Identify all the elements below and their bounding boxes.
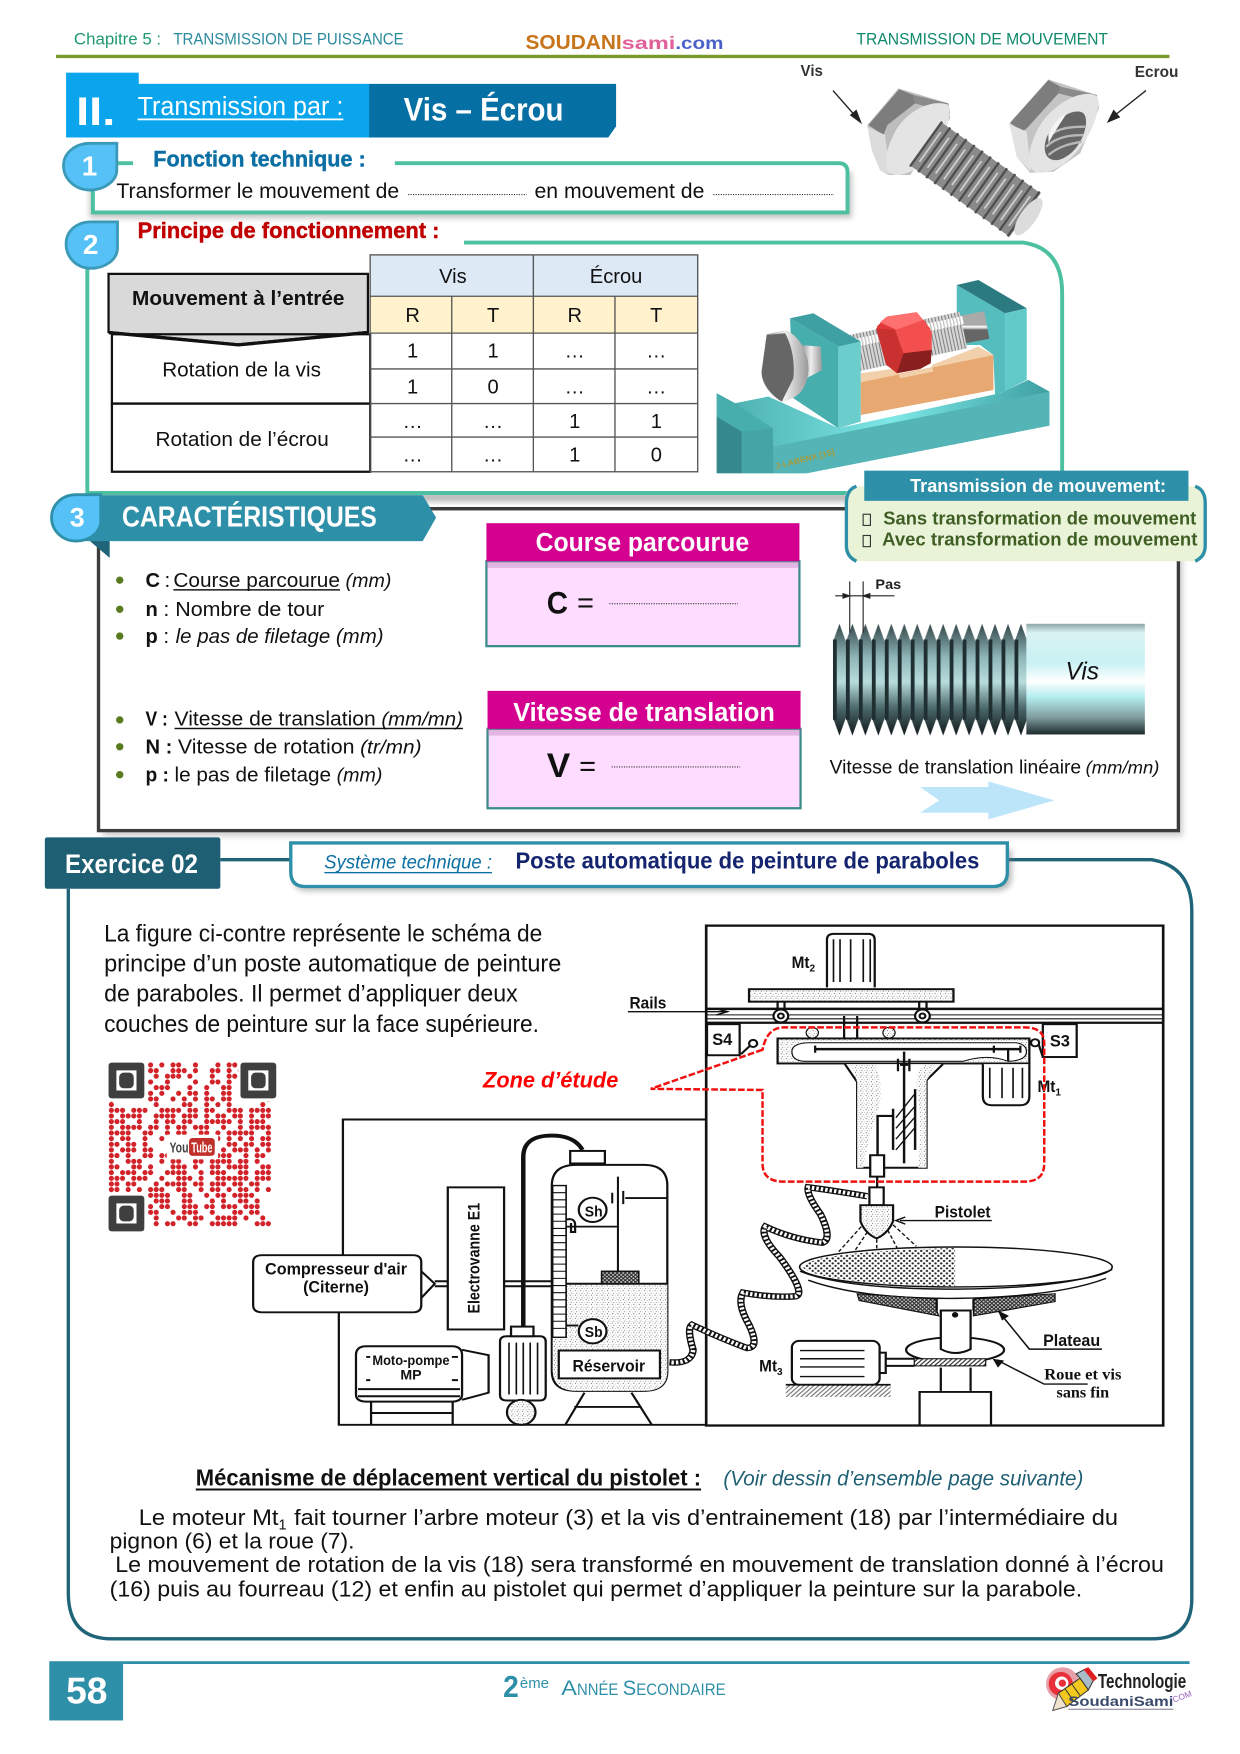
input motion column: Rotation de la vis	[162, 360, 321, 382]
caption: vitesse de translation linéaire: (mm/mn)	[1086, 758, 1159, 778]
truth table: …	[403, 411, 423, 433]
page header: sami	[622, 33, 675, 53]
labels: paint station: Mt	[792, 954, 810, 972]
page header: SOUDANI	[526, 32, 622, 54]
bullet list: vitesse: Vitesse de translation	[175, 708, 376, 731]
band heading: caractéristiques: 3	[70, 503, 85, 533]
truth table: Écrou	[590, 265, 642, 288]
heading: fonction technique: Fonction technique :	[153, 147, 366, 172]
formula card: course parcourue: C	[547, 586, 568, 621]
exercise tab: Exercice 02	[45, 837, 290, 889]
label and arrow: Ecrou: Ecrou	[1135, 64, 1178, 81]
labels: paint station: S4	[712, 1030, 733, 1049]
logo: Technologie SoudaniSami: COM	[1171, 1688, 1193, 1704]
bullet list: course: : Nombre de tour	[163, 598, 324, 621]
formula card: course parcourue: Course parcourue	[536, 529, 749, 557]
callout: transmission de mouvement: Avec transformation de mouvement	[882, 529, 1197, 550]
bullet list: course: (mm)	[346, 571, 391, 592]
input motion column	[109, 274, 370, 472]
pitch dimension	[835, 576, 901, 633]
intro paragraph	[104, 920, 561, 1038]
system title pill	[291, 843, 1012, 891]
icon: QR code: You	[169, 1141, 188, 1157]
truth table: 1	[569, 411, 580, 433]
page header: TRANSMISSION DE MOUVEMENT	[856, 30, 1108, 49]
labels: reservoir side: Sb	[585, 1325, 603, 1341]
description paragraph: fait tourner l’arbre moteur (3) et la vis d’entrainement (18) par l’intermédiaire du	[294, 1505, 1118, 1530]
bullet list: vitesse: p :	[145, 763, 169, 786]
school year: ème	[520, 1676, 549, 1692]
callout: transmission de mouvement: Sans transformation de mouvement	[883, 507, 1196, 528]
bolt head	[867, 88, 950, 175]
panel 2: principe de fonctionnement	[66, 218, 1062, 502]
truth table: 0	[488, 377, 499, 399]
sentence with blanks: en mouvement de	[534, 179, 704, 203]
bullet list: vitesse	[116, 708, 463, 786]
labels: reservoir side: Electrovanne E1	[465, 1203, 484, 1314]
truth table: …	[565, 341, 585, 363]
bullet list: vitesse: Vitesse de rotation	[178, 735, 354, 758]
logo: Technologie SoudaniSami: SoudaniSami	[1068, 1693, 1173, 1709]
description paragraph: Le moteur Mt	[139, 1505, 279, 1530]
caption: vitesse de translation linéaire: Vitesse de translation linéaire	[830, 758, 1081, 779]
page header: Chapitre 5 :	[74, 30, 161, 49]
labels: paint station: Roue et vis	[1044, 1367, 1121, 1384]
intro paragraph: couches de peinture sur la face supérieure.	[104, 1011, 539, 1038]
page number: 58	[66, 1671, 107, 1712]
school year: S	[623, 1676, 636, 1700]
school year: A	[561, 1676, 578, 1700]
labels: reservoir side: Compresseur d'air	[265, 1259, 407, 1278]
truth table: T	[487, 305, 499, 327]
intro paragraph: de paraboles. Il permet d’appliquer deux	[104, 981, 518, 1008]
heading: mécanisme: Mécanisme de déplacement vertical du pistolet :	[196, 1465, 701, 1491]
bullet list: vitesse: (mm)	[337, 765, 382, 786]
truth table: R	[567, 305, 582, 327]
truth table	[370, 255, 698, 472]
bullet list: course: C	[145, 569, 160, 592]
description paragraph: (16) puis au fourreau (12) et enfin au pistolet qui permet d’appliquer la peinture sur la parabole.	[110, 1576, 1082, 1601]
truth table: …	[483, 411, 503, 433]
formula card: course parcourue: =	[577, 588, 594, 620]
sentence with blanks: Transformer le mouvement de	[116, 179, 399, 203]
red nut	[877, 312, 931, 373]
heading: mécanisme	[196, 1465, 1083, 1491]
school year: 2	[503, 1671, 519, 1704]
bullet list: vitesse: (tr/mn)	[360, 737, 422, 758]
schematic: reservoir, compressor and motor pump	[253, 1120, 705, 1425]
screw thread diagram: Vis	[1065, 659, 1099, 686]
heading: mécanisme: (Voir dessin d’ensemble page suivante)	[723, 1467, 1083, 1491]
illustration: screw and nut vise: J-LABENX [15]	[774, 447, 836, 471]
label and arrow: Vis: Vis	[801, 63, 823, 80]
heading: principe: Principe de fonctionnement :	[138, 218, 439, 243]
bullet list: vitesse: (mm/mn)	[381, 710, 463, 731]
truth table: 0	[651, 445, 662, 467]
truth table: 1	[488, 341, 499, 363]
school year	[503, 1671, 726, 1704]
band heading: caractéristiques	[52, 495, 436, 558]
icon: QR code: Tube	[191, 1141, 213, 1157]
labels: paint station: Mt	[759, 1358, 778, 1376]
badge 1: 1	[82, 151, 97, 182]
truth table: …	[565, 377, 585, 399]
logo: Technologie SoudaniSami	[1046, 1667, 1193, 1711]
label and arrow: Vis	[801, 63, 862, 124]
panel 1: fonction technique	[64, 143, 852, 218]
bullet list: course: n	[145, 598, 158, 621]
title banner: Transmission par Vis – Écrou: II.	[76, 89, 115, 134]
truth table: 1	[651, 411, 662, 433]
nut	[1009, 79, 1099, 173]
labels: paint station	[630, 954, 1121, 1401]
labels: paint station: Mt	[1038, 1078, 1056, 1096]
labels: paint station: 3	[777, 1367, 783, 1378]
callout: transmission de mouvement	[845, 471, 1206, 561]
title banner: Transmission par Vis – Écrou	[66, 73, 616, 138]
labels: paint station: Pistolet	[935, 1203, 991, 1221]
icon: QR code	[106, 1060, 281, 1235]
wooden block	[861, 355, 993, 415]
title banner: Transmission par Vis – Écrou: Transmission par :	[138, 93, 343, 121]
truth table: …	[646, 341, 666, 363]
labels: paint station: 2	[809, 963, 815, 974]
input motion column: Rotation de l’écrou	[156, 429, 329, 451]
description paragraph	[110, 1505, 1164, 1601]
intro paragraph: principe d’un poste automatique de peinture	[104, 950, 561, 977]
page header: .com	[675, 33, 723, 53]
screw	[960, 325, 987, 330]
knob	[800, 345, 822, 380]
bullet list: course: Course parcourue	[173, 569, 340, 592]
truth table: 1	[407, 377, 418, 399]
bullet list: vitesse: le pas de filetage	[175, 763, 331, 786]
labels: reservoir side	[265, 1203, 646, 1383]
right upright	[957, 285, 1005, 395]
truth table: 1	[407, 341, 418, 363]
bullet list: course: :	[163, 625, 169, 648]
truth table: T	[650, 305, 662, 327]
system title pill: Poste automatique de peinture de paraboles	[515, 848, 979, 874]
formula card: vitesse de translation	[488, 691, 801, 808]
description paragraph: pignon (6) et la roue (7).	[110, 1528, 354, 1553]
title banner: Transmission par Vis – Écrou: Vis – Écrou	[404, 91, 564, 128]
bullet list: vitesse: N :	[145, 735, 172, 758]
badge 1	[64, 143, 117, 190]
bullet list: course: :	[164, 569, 170, 592]
school year: ECONDAIRE	[636, 1680, 726, 1699]
callout: transmission de mouvement: Transmission de mouvement:	[910, 475, 1166, 496]
bullet list: course: p	[145, 625, 158, 648]
page number	[49, 1661, 123, 1720]
truth table: Vis	[439, 266, 467, 288]
input motion column: Mouvement à l’entrée	[132, 288, 344, 310]
labels: reservoir side: Moto-pompe	[372, 1352, 450, 1368]
truth table: …	[483, 445, 503, 467]
illustration: bolt and nut	[867, 79, 1099, 239]
label: zone d'étude: Zone d’étude	[482, 1068, 618, 1093]
label and arrow: Ecrou	[1107, 64, 1178, 123]
labels: paint station: Plateau	[1043, 1331, 1100, 1350]
schematic: paint gun, plate and rails	[628, 926, 1163, 1426]
truth table: …	[403, 445, 423, 467]
description paragraph: 1	[278, 1517, 287, 1533]
page header	[56, 30, 1169, 58]
callout: zone d'étude outline	[651, 1027, 1044, 1182]
bolt shank	[925, 143, 1025, 215]
arrow: translation direction	[920, 781, 1054, 819]
description paragraph: Le mouvement de rotation de la vis (18) sera transformé en mouvement de translation donné à l’écrou	[115, 1552, 1164, 1577]
panel 3: caractéristiques (frame behind panel 2)	[98, 509, 1183, 836]
labels: paint station: S3	[1050, 1031, 1070, 1050]
screw thread diagram	[833, 576, 1145, 736]
intro paragraph: La figure ci-contre représente le schéma de	[104, 920, 542, 947]
truth table: …	[646, 377, 666, 399]
labels: paint station: sans fin	[1057, 1384, 1109, 1401]
exercise tab: Exercice 02: Exercice 02	[65, 849, 198, 879]
labels: reservoir side: (Citerne)	[303, 1277, 369, 1296]
labels: paint station: Rails	[630, 994, 666, 1012]
bullet list: course	[116, 569, 391, 648]
illustration: screw and nut vise	[717, 280, 1049, 473]
labels: reservoir side: Sh	[585, 1204, 603, 1220]
bullet list: vitesse: V :	[145, 708, 168, 731]
left upright	[790, 318, 838, 428]
formula card: vitesse de translation: =	[579, 751, 596, 783]
footer	[49, 1661, 1193, 1720]
band heading: caractéristiques: CARACTÉRISTIQUES	[122, 500, 377, 534]
badge 2	[66, 222, 117, 268]
badge 2: 2	[83, 229, 98, 260]
formula card: vitesse de translation: Vitesse de translation	[513, 699, 775, 727]
logo: Technologie SoudaniSami: Technologie	[1098, 1671, 1186, 1693]
formula card: vitesse de translation: V	[547, 747, 570, 785]
truth table: 1	[569, 445, 580, 467]
labels: reservoir side: Réservoir	[572, 1357, 646, 1376]
formula card: course parcourue	[486, 523, 799, 646]
bullet list: course: le pas de filetage (mm)	[176, 625, 384, 648]
labels: paint station: 1	[1055, 1088, 1061, 1099]
pitch dimension: Pas	[875, 576, 901, 592]
system title pill: Système technique :	[324, 853, 492, 874]
paint hose	[669, 1187, 867, 1363]
labels: reservoir side: MP	[400, 1367, 422, 1383]
exercise frame	[68, 860, 1192, 1639]
sentence with blanks	[116, 179, 834, 203]
panel 3 content	[52, 495, 1159, 819]
school year: NNÉE	[577, 1680, 618, 1699]
truth table: R	[405, 305, 420, 327]
page header: TRANSMISSION DE PUISSANCE	[173, 30, 404, 49]
